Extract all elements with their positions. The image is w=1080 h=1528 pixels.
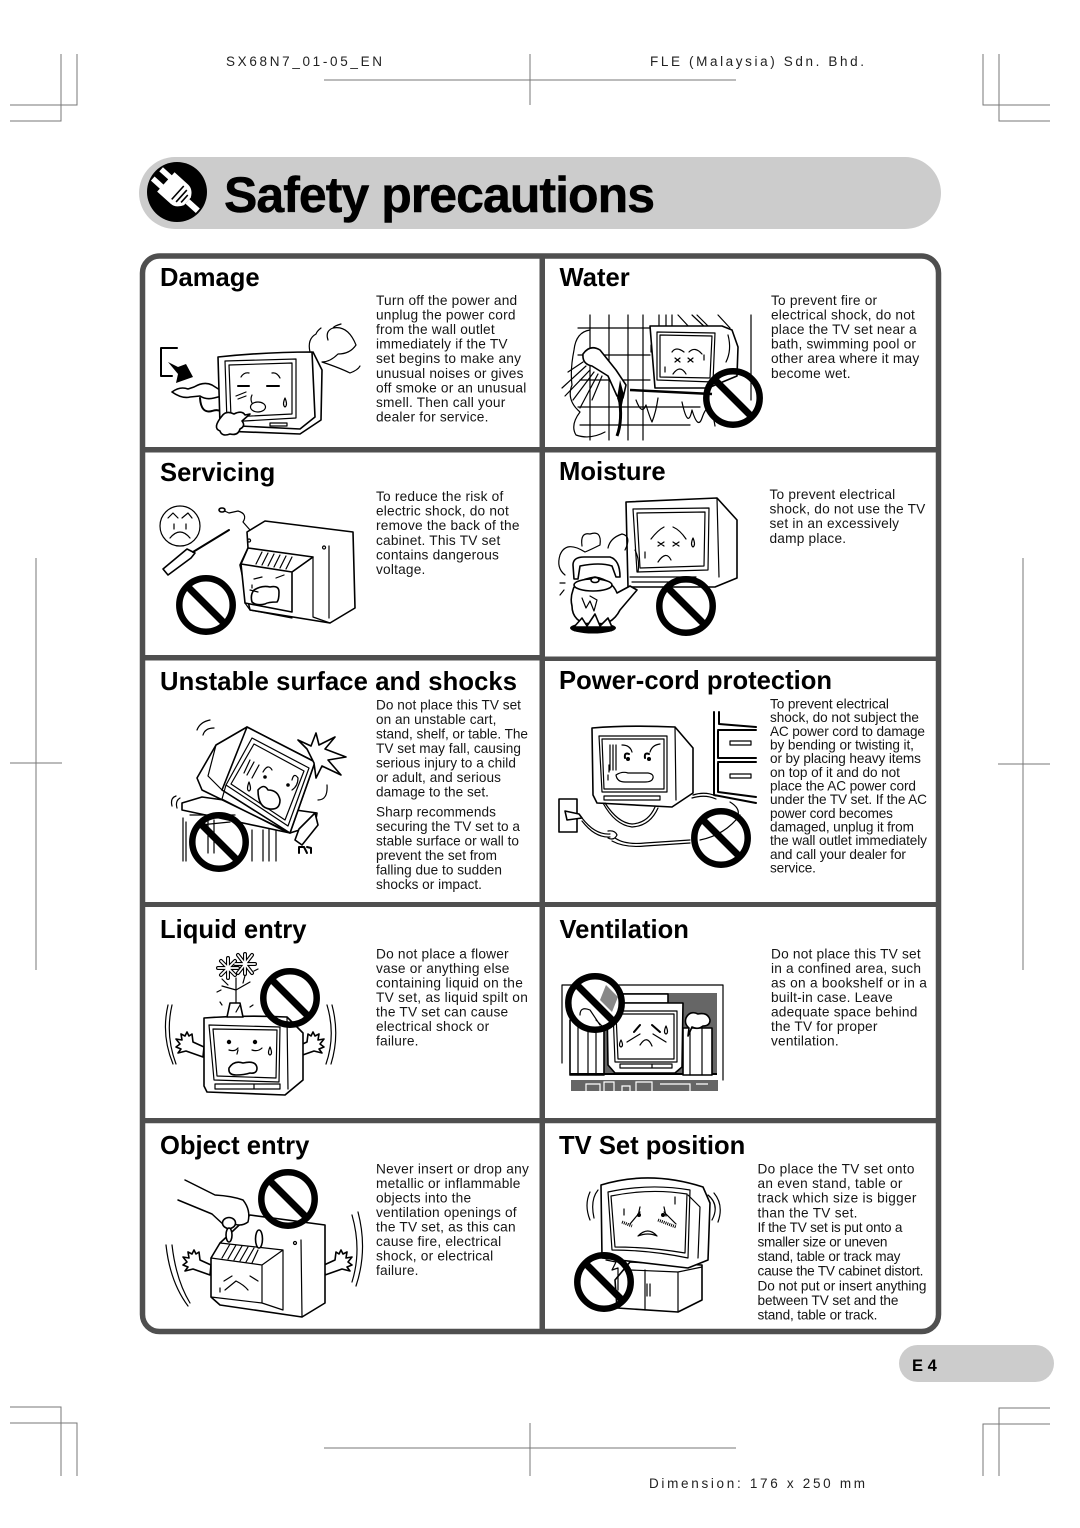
text: ventilation: in a confined area, such	[771, 961, 921, 976]
text: tv set position: an even stand, table or	[758, 1176, 903, 1191]
title: Safety precautions	[224, 167, 655, 223]
text: damage: Turn off the power and	[376, 293, 517, 308]
text: water	[771, 293, 919, 381]
text: moisture: To prevent electrical	[770, 487, 895, 502]
text: damage: unusual noises or gives	[376, 366, 524, 381]
text: unstable surface: or adult, and serious	[376, 770, 501, 785]
page number pill	[899, 1345, 1054, 1382]
header: company: FLE (Malaysia) Sdn. Bhd.	[650, 54, 864, 69]
text: unstable surface: stand, shelf, or table. The	[376, 726, 528, 742]
illustration: steaming kettle	[559, 498, 737, 634]
text: unstable surface: securing the TV set to a	[376, 819, 520, 834]
frame	[142, 254, 938, 1333]
text: unstable surface: on an unstable cart,	[376, 712, 496, 727]
text: power cord: shock, do not subject the	[770, 710, 919, 725]
text: water: bath, swimming pool or	[771, 337, 916, 352]
heading: unstable surface: Unstable surface and shocks	[160, 668, 517, 696]
text: servicing: electric shock, do not	[376, 504, 509, 519]
text: moisture: shock, do not use the TV	[770, 502, 926, 517]
text: tv set position: If the TV set is put onto a	[758, 1220, 903, 1235]
text: liquid entry: the TV set can cause	[376, 1004, 508, 1020]
illustration: smoking TV	[161, 324, 360, 435]
text: ventilation: adequate space behind	[771, 1004, 918, 1020]
text: servicing: remove the back of the	[376, 518, 520, 533]
text: power cord: or by placing heavy items	[770, 751, 921, 766]
text: unstable surface: shocks or impact.	[376, 877, 482, 892]
illustration: falling TV	[172, 720, 346, 869]
text: object entry: the TV set, as this can	[376, 1220, 516, 1234]
panel: servicing	[160, 459, 520, 632]
text: moisture: damp place.	[770, 531, 846, 546]
text: damage: set begins to make any	[376, 351, 521, 366]
text: liquid entry: Do not place a flower	[376, 946, 509, 962]
text: unstable surface: prevent the set from	[376, 848, 497, 863]
panel: tv set position	[559, 1132, 926, 1322]
text: power cord: the wall outlet immediately	[770, 833, 927, 848]
text: tv set position: track which size is bigger	[758, 1191, 917, 1206]
text: ventilation: as on a bookshelf or in a	[771, 976, 927, 990]
text: tv set position: stand, table or track may	[758, 1249, 901, 1264]
text: object entry: Never insert or drop any	[376, 1162, 529, 1176]
text: unstable surface: Sharp recommends	[376, 804, 496, 820]
text: object entry	[376, 1162, 529, 1278]
text: liquid entry: TV set, as liquid spilt on	[376, 990, 528, 1005]
text: water: other area where it may	[771, 351, 919, 366]
illustration: object dropped into TV	[166, 1172, 363, 1317]
panel: damage	[160, 264, 526, 435]
title banner	[139, 157, 941, 229]
text: object entry: shock, or electrical	[376, 1248, 493, 1264]
illustration: TV near shower	[562, 315, 760, 440]
text: object entry: ventilation openings of	[376, 1205, 517, 1220]
heading: water: Water	[560, 264, 630, 292]
heading: power cord: Power-cord protection	[559, 667, 832, 695]
illustration: TV on power cord	[559, 712, 756, 865]
text: damage: immediately if the TV	[376, 337, 508, 352]
text: liquid entry: electrical shock or	[376, 1019, 490, 1034]
text: tv set position: cause the TV cabinet distort.	[758, 1264, 924, 1279]
text: power cord: and call your dealer for	[770, 847, 906, 862]
text: damage: from the wall outlet	[376, 322, 495, 337]
text: power cord: by bending or twisting it,	[770, 738, 914, 752]
text: power cord: power cord becomes	[770, 806, 893, 821]
panel: water	[560, 264, 919, 440]
text: liquid entry: failure.	[376, 1034, 419, 1048]
text: damage: dealer for service.	[376, 409, 489, 424]
panel: ventilation	[560, 916, 927, 1091]
text: power cord: on top of it and do not	[770, 765, 900, 780]
text: tv set position: than the TV set.	[758, 1205, 858, 1220]
page number: E 4	[912, 1357, 938, 1375]
text: unstable surface: serious injury to a child	[376, 756, 516, 770]
text: power cord: To prevent electrical	[770, 696, 889, 712]
text: power cord	[770, 696, 927, 876]
text: power cord: service.	[770, 860, 816, 876]
text: tv set position: smaller size or uneven	[758, 1234, 888, 1250]
text: ventilation: Do not place this TV set	[771, 946, 921, 962]
text: ventilation	[771, 946, 927, 1048]
text: object entry: failure.	[376, 1263, 419, 1278]
text: tv set position: Do place the TV set onto	[758, 1162, 914, 1176]
text: liquid entry: containing liquid on the	[376, 976, 523, 990]
text: tv set position: Do not put or insert anything	[758, 1278, 926, 1293]
text: tv set position: between TV set and the	[758, 1293, 898, 1308]
text: unstable surface	[376, 698, 528, 892]
heading: damage: Damage	[160, 264, 260, 292]
text: water: place the TV set near a	[771, 322, 917, 337]
text: unstable surface: Do not place this TV set	[376, 698, 521, 712]
text: ventilation: the TV for proper	[771, 1019, 878, 1034]
text: liquid entry	[376, 946, 528, 1048]
text: moisture: set in an excessively	[770, 516, 899, 531]
text: unstable surface: TV set may fall, causing	[376, 741, 521, 756]
illustration: TV in bookshelf	[562, 976, 723, 1091]
text: damage	[376, 293, 526, 424]
text: liquid entry: vase or anything else	[376, 961, 510, 976]
text: object entry: metallic or inflammable	[376, 1176, 521, 1191]
heading: moisture: Moisture	[559, 458, 666, 486]
heading: liquid entry: Liquid entry	[160, 916, 307, 944]
text: unstable surface: damage to the set.	[376, 784, 489, 800]
text: damage: smell. Then call your	[376, 395, 506, 410]
text: ventilation: ventilation.	[771, 1034, 839, 1048]
text: power cord: place the AC power cord	[770, 778, 916, 794]
text: tv set position: stand, table or track.	[758, 1308, 878, 1322]
heading: tv set position: TV Set position	[559, 1132, 745, 1160]
text: damage: unplug the power cord	[376, 308, 516, 323]
text: object entry: objects into the	[376, 1190, 471, 1206]
panel: moisture	[559, 458, 926, 634]
text: unstable surface: stable surface or wall to	[376, 834, 519, 848]
footer: dimensions: Dimension: 176 x 250 mm	[649, 1476, 865, 1491]
text: water: To prevent fire or	[771, 293, 878, 308]
heading: ventilation: Ventilation	[560, 916, 689, 944]
text: damage: off smoke or an unusual	[376, 380, 526, 395]
text: moisture	[770, 487, 926, 546]
heading: object entry: Object entry	[160, 1132, 310, 1160]
heading: servicing: Servicing	[160, 459, 275, 487]
illustration: TV on small stand	[577, 1178, 720, 1312]
text: servicing: cabinet. This TV set	[376, 533, 500, 548]
text: power cord: damaged, unplug it from	[770, 820, 914, 834]
header: file code: SX68N7_01-05_EN	[226, 54, 382, 69]
text: ventilation: built-in case. Leave	[771, 990, 893, 1005]
text: servicing: contains dangerous	[376, 547, 499, 562]
panel: object entry	[160, 1132, 529, 1317]
text: unstable surface: falling due to sudden	[376, 862, 502, 878]
illustration: vase on TV	[165, 954, 336, 1095]
text: power cord: under the TV set. If the AC	[770, 792, 927, 807]
text: servicing	[376, 489, 520, 577]
panel: liquid entry	[160, 916, 528, 1095]
text: water: become wet.	[771, 366, 851, 381]
text: servicing: voltage.	[376, 562, 426, 577]
text: power cord: AC power cord to damage	[770, 724, 925, 739]
icon: power plug	[147, 162, 207, 222]
text: water: electrical shock, do not	[771, 308, 915, 323]
panel: unstable surface and shocks	[160, 668, 528, 892]
text: servicing: To reduce the risk of	[376, 489, 503, 504]
text: tv set position	[758, 1162, 926, 1322]
text: object entry: cause fire, electrical	[376, 1234, 501, 1249]
illustration: opened TV back	[160, 506, 355, 632]
panel: power-cord protection	[559, 667, 927, 876]
